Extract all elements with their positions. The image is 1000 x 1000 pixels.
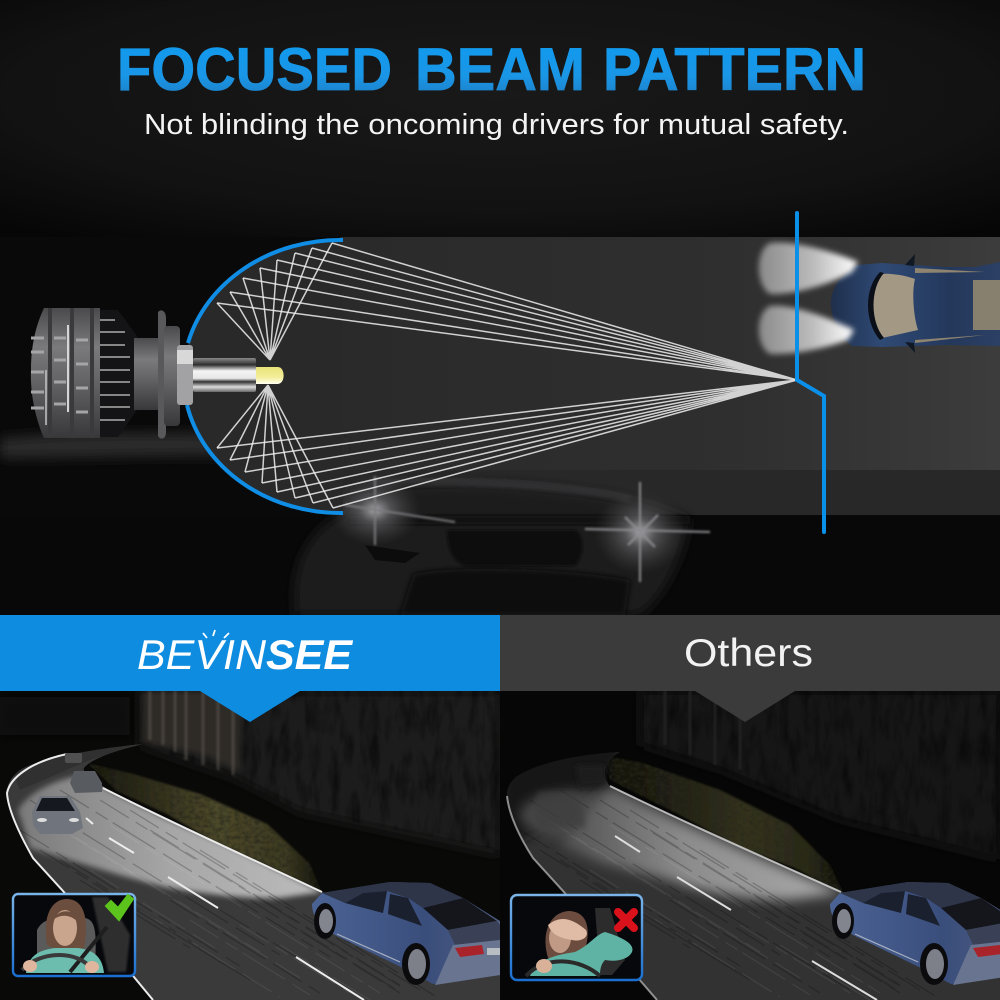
subtitle: Not blinding the oncoming drivers for mutual safety.	[144, 109, 849, 141]
torso	[530, 932, 633, 976]
raised hand	[548, 919, 587, 941]
wall	[140, 691, 500, 855]
left pointer	[200, 691, 300, 722]
heat sink fins	[90, 310, 137, 437]
face	[53, 910, 77, 946]
wall	[640, 691, 1000, 860]
sedan	[312, 882, 500, 985]
distant cars	[32, 753, 102, 834]
hands	[23, 960, 99, 973]
icon: red cross	[618, 912, 634, 928]
brand header	[0, 615, 500, 691]
seat	[37, 918, 96, 965]
LED chip	[256, 367, 284, 384]
LED bulb	[31, 308, 284, 439]
seat belt	[70, 927, 107, 972]
road	[0, 740, 500, 1000]
near car	[32, 796, 83, 834]
hair	[46, 899, 86, 949]
title	[117, 36, 866, 103]
road	[500, 740, 1000, 1000]
inset: dazzled driver	[511, 895, 642, 980]
icon: headlight beams	[759, 242, 858, 354]
icon: right headlight flare	[585, 482, 710, 582]
icon: green check	[106, 895, 133, 920]
blurred oncoming cars	[532, 765, 605, 828]
icon: left headlight flare	[329, 474, 455, 546]
middle car	[70, 771, 102, 793]
cutoff line	[797, 213, 824, 532]
reflector arcs	[187, 240, 343, 513]
title: BEAM	[415, 36, 585, 103]
lower hand	[536, 959, 552, 973]
face	[549, 923, 571, 953]
others header: Others	[684, 632, 813, 675]
panel: Bevinsee road scene	[0, 691, 500, 1000]
collar and flange	[134, 310, 193, 439]
light rays	[217, 243, 797, 508]
title: FOCUSED	[117, 36, 392, 103]
steering wheel	[22, 955, 92, 970]
road markings	[7, 754, 364, 1000]
sedan	[830, 882, 1000, 985]
brand logo: BEVINSEE	[137, 631, 354, 678]
panel: others road scene	[500, 691, 1000, 1000]
road markings	[507, 786, 877, 1000]
others header	[500, 615, 1000, 691]
steering wheel	[526, 961, 600, 976]
door pillar blur	[92, 897, 130, 972]
grass verge	[87, 763, 322, 893]
torso	[26, 948, 104, 973]
right pointer	[695, 691, 795, 722]
grass verge	[600, 755, 845, 895]
icon: car from above	[831, 254, 1000, 353]
oncoming car front silhouette	[294, 474, 710, 615]
chrome shaft	[193, 358, 256, 392]
far car	[65, 753, 82, 763]
car top view with headlight beams	[759, 242, 1000, 354]
title: PATTERN	[603, 36, 866, 103]
seat shadow	[595, 908, 625, 975]
rear housing	[31, 308, 100, 438]
inset: calm driver	[13, 894, 135, 976]
hair	[545, 911, 588, 960]
reflector interior	[188, 240, 343, 513]
